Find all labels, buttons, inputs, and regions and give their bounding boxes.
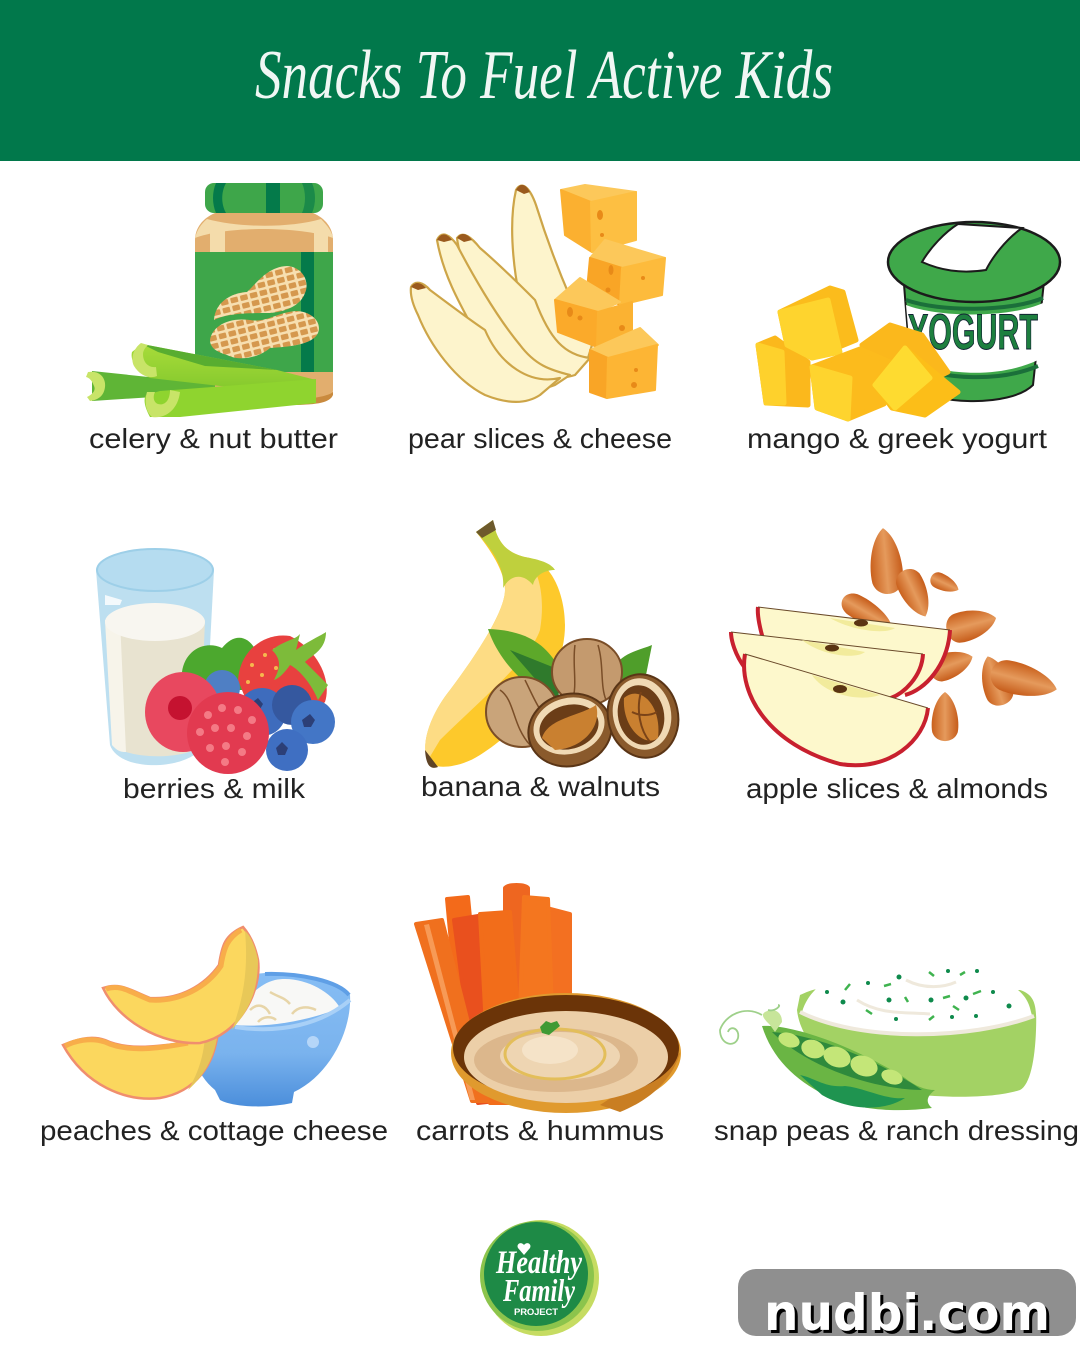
panel: peaches and cottage cheese	[40, 927, 388, 1146]
header banner	[0, 0, 1080, 161]
icon: leaves	[488, 629, 652, 705]
icon: walnuts	[486, 639, 686, 776]
icon: mixed berries	[145, 632, 335, 774]
label: apple slices & almonds	[746, 773, 1048, 804]
icon: peach slice upper	[103, 927, 258, 1043]
panel: mango and greek yogurt	[747, 222, 1060, 454]
logo text: Healthy	[495, 1245, 582, 1281]
panel: carrots and hummus	[416, 885, 681, 1146]
label: snap peas & ranch dressing	[714, 1115, 1079, 1146]
icon: snap pea pod	[720, 1005, 935, 1110]
icon: nut butter jar	[195, 183, 333, 405]
icon: yogurt cup	[888, 222, 1060, 401]
icon: peach slice lower	[63, 1030, 218, 1099]
panel: celery and nut butter	[86, 183, 338, 454]
label: peaches & cottage cheese	[40, 1115, 388, 1146]
panel: banana and walnuts	[421, 520, 686, 802]
logo icon: heart	[518, 1243, 530, 1255]
watermark	[738, 1269, 1076, 1342]
icon: mango cubes	[758, 288, 958, 419]
icon: hummus plate	[451, 993, 681, 1113]
icon: pear slices	[411, 185, 592, 402]
icon: carrot sticks	[416, 885, 570, 1103]
panel: berries and milk	[96, 549, 335, 804]
icon: glass of milk	[96, 549, 214, 765]
title: Snacks To Fuel Active Kids	[255, 37, 833, 114]
panel: apple slices and almonds	[731, 527, 1061, 804]
logo: Healthy Family Project	[480, 1220, 599, 1336]
icon: ranch dressing bowl	[797, 966, 1036, 1097]
icon: banana	[425, 520, 565, 768]
watermark text: nudbi.com	[764, 1284, 1050, 1342]
label: pear slices & cheese	[408, 423, 672, 454]
icon: celery sticks	[86, 343, 316, 417]
label: mango & greek yogurt	[747, 423, 1047, 454]
panel: snap peas and ranch dressing	[714, 966, 1079, 1146]
label: carrots & hummus	[416, 1115, 664, 1146]
icon: cheese cubes	[555, 185, 665, 398]
logo text: family: Family	[502, 1272, 576, 1308]
label: banana & walnuts	[421, 771, 660, 802]
icon: blue bowl with cottage cheese	[188, 973, 350, 1106]
label: celery & nut butter	[89, 423, 338, 454]
label: berries & milk	[123, 773, 306, 804]
icon: apple slices	[731, 607, 950, 765]
logo text: project: PROJECT	[514, 1307, 558, 1318]
icon: almonds	[837, 527, 1061, 741]
panel: pear slices and cheese	[408, 185, 672, 454]
